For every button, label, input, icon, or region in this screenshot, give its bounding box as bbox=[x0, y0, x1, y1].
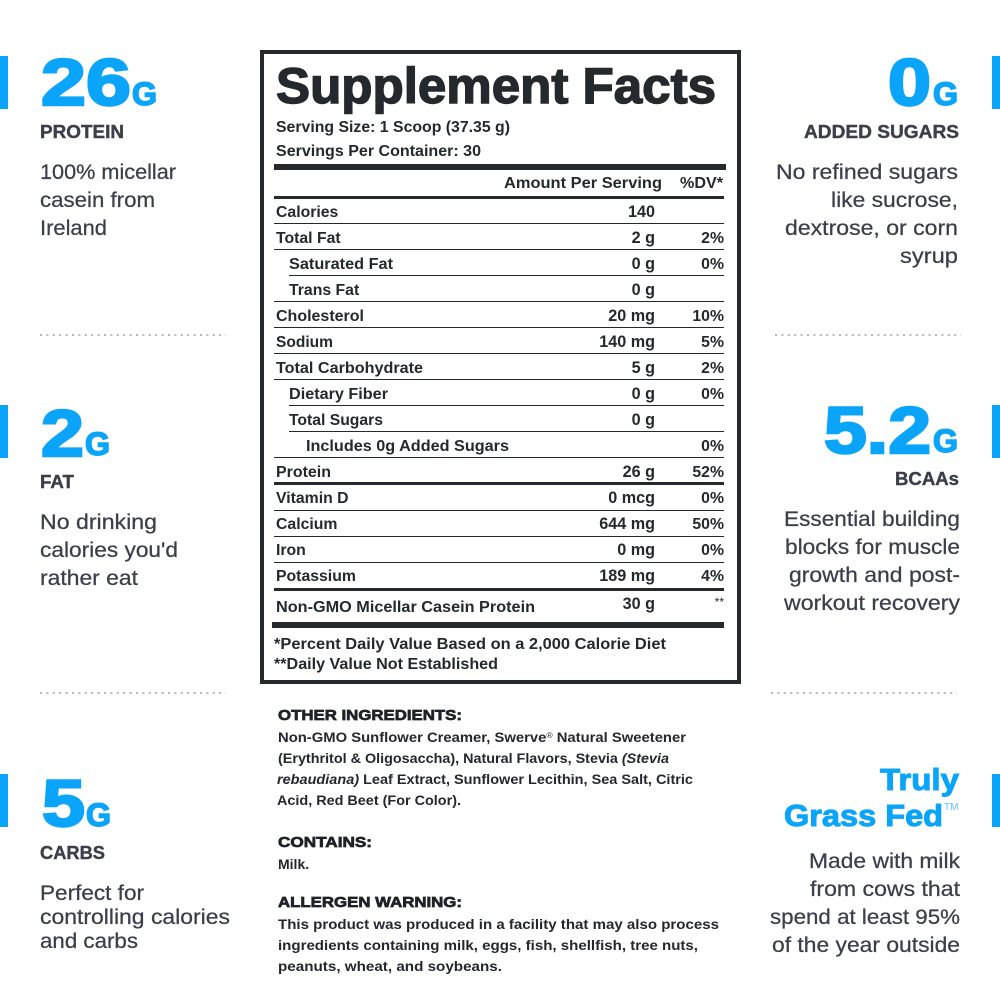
panel: carbs stat: CARBS bbox=[40, 843, 105, 863]
footnotes bbox=[272, 622, 724, 673]
table header bbox=[274, 164, 726, 199]
panel: BCAAs stat bbox=[783, 393, 1000, 615]
panel: protein stat: G bbox=[132, 76, 157, 112]
nutrient rows: Calories bbox=[276, 204, 339, 221]
serving info: Servings Per Container: 30 bbox=[276, 143, 481, 160]
nutrient rows: Saturated Fat bbox=[289, 256, 394, 273]
serving info: Serving Size: 1 Scoop (37.35 g) bbox=[276, 119, 510, 136]
nutrient rows: 189 mg bbox=[599, 567, 655, 585]
nutrient rows: 26 g bbox=[623, 463, 655, 481]
panel: carbs stat bbox=[0, 766, 230, 953]
panel: BCAAs stat: 5.2 bbox=[824, 393, 931, 467]
panel: added sugars stat: dextrose, or corn bbox=[785, 217, 958, 240]
nutrient rows: Vitamin D bbox=[276, 490, 349, 507]
panel: protein stat: Ireland bbox=[40, 217, 107, 240]
panel: grass fed stat: Grass Fed bbox=[784, 798, 943, 833]
nutrient rows: Non-GMO Micellar Casein Protein bbox=[276, 599, 535, 616]
text block: allergen warning: This product was produced in a facility that may also process bbox=[278, 916, 719, 932]
table header: %DV* bbox=[680, 175, 724, 192]
nutrient rows: 52% bbox=[692, 464, 724, 481]
panel: grass fed stat: spend at least 95% bbox=[770, 906, 960, 929]
panel: protein stat: 100% micellar bbox=[40, 161, 176, 184]
panel: BCAAs stat: Essential building bbox=[784, 508, 960, 531]
panel: fat stat: FAT bbox=[40, 472, 74, 492]
nutrient rows: 0 mg bbox=[617, 541, 655, 559]
panel: carbs stat: controlling calories bbox=[40, 906, 230, 929]
nutrient rows: 140 mg bbox=[599, 333, 655, 351]
panel: added sugars stat bbox=[776, 45, 1000, 268]
panel: BCAAs stat: growth and post- bbox=[789, 564, 960, 587]
panel: added sugars stat: G bbox=[933, 76, 958, 112]
nutrient rows: Potassium bbox=[276, 568, 356, 585]
panel: grass fed stat: Made with milk bbox=[809, 850, 961, 873]
heading: supplement facts: Supplement Facts bbox=[276, 58, 716, 114]
nutrient rows: Trans Fat bbox=[289, 282, 360, 299]
text block: allergen warning: peanuts, wheat, and soybeans. bbox=[278, 958, 502, 974]
text block: other ingredients: Natural Sweetener bbox=[553, 729, 687, 745]
nutrient rows: 5% bbox=[701, 334, 724, 351]
nutrient rows: 0 mcg bbox=[608, 489, 655, 507]
panel: added sugars stat: syrup bbox=[900, 245, 958, 268]
nutrient rows: Iron bbox=[276, 542, 306, 559]
nutrient rows: 10% bbox=[692, 308, 724, 325]
panel: BCAAs stat: BCAAs bbox=[895, 469, 959, 489]
nutrient rows: 0% bbox=[701, 542, 724, 559]
nutrient rows: 20 mg bbox=[608, 307, 655, 325]
panel: fat stat: 2 bbox=[41, 396, 84, 470]
nutrient rows: 0% bbox=[701, 386, 724, 403]
panel: BCAAs stat: workout recovery bbox=[783, 592, 961, 615]
nutrient rows: Total Fat bbox=[276, 230, 341, 247]
text block: other ingredients: (Erythritol & Oligosaccha), Natural Flavors, Stevia (Stevia bbox=[278, 750, 669, 766]
nutrient rows: 2% bbox=[701, 230, 724, 247]
text block: other ingredients: Non-GMO Sunflower Creamer, Swerve bbox=[278, 729, 532, 745]
text block: allergen warning: ALLERGEN WARNING: bbox=[278, 895, 462, 911]
nutrient rows: 2 g bbox=[632, 229, 655, 247]
nutrient rows: Sodium bbox=[276, 334, 333, 351]
footnotes: *Percent Daily Value Based on a 2,000 Calorie Diet bbox=[274, 636, 667, 653]
text block: allergen warning: ingredients containing milk, eggs, fish, shellfish, tree nuts, bbox=[278, 937, 698, 953]
panel: grass fed stat: TM bbox=[944, 802, 958, 813]
footnotes: **Daily Value Not Established bbox=[274, 656, 498, 673]
text block: other ingredients: rebaudiana) Leaf Extract, Sunflower Lecithin, Sea Salt, Citric bbox=[277, 771, 693, 787]
nutrient rows: 0 g bbox=[632, 281, 655, 299]
panel: fat stat: calories you'd bbox=[40, 539, 178, 562]
panel: carbs stat: G bbox=[86, 797, 111, 833]
panel: grass fed stat bbox=[770, 762, 1000, 957]
table header: Amount Per Serving bbox=[504, 175, 662, 192]
text block: contains bbox=[278, 835, 372, 872]
panel: grass fed stat: from cows that bbox=[810, 878, 960, 901]
nutrient rows: Calcium bbox=[276, 516, 337, 533]
nutrient rows: 644 mg bbox=[599, 515, 655, 533]
nutrient rows: 140 bbox=[628, 203, 655, 221]
panel: protein stat: casein from bbox=[40, 189, 155, 212]
nutrient rows: ** bbox=[715, 595, 724, 609]
nutrient rows: Dietary Fiber bbox=[289, 386, 388, 403]
nutrient rows: Includes 0g Added Sugars bbox=[306, 438, 509, 455]
nutrient rows: Total Sugars bbox=[289, 412, 383, 429]
text block: other ingredients: Acid, Red Beet (For Color). bbox=[277, 792, 461, 808]
panel: added sugars stat: like sucrose, bbox=[831, 189, 958, 212]
text block: allergen warning bbox=[278, 895, 719, 974]
nutrient rows bbox=[274, 203, 724, 616]
panel: carbs stat: Perfect for bbox=[40, 882, 144, 905]
panel: fat stat bbox=[0, 396, 178, 590]
nutrient rows: Cholesterol bbox=[276, 308, 364, 325]
panel: carbs stat: 5 bbox=[42, 766, 85, 840]
nutrient rows: Total Carbohydrate bbox=[276, 360, 423, 377]
panel: protein stat: PROTEIN bbox=[40, 122, 124, 142]
nutrient rows: Protein bbox=[276, 464, 331, 481]
panel: protein stat: 26 bbox=[41, 45, 131, 119]
panel: added sugars stat: ADDED SUGARS bbox=[804, 122, 959, 142]
nutrient rows: 30 g bbox=[623, 595, 655, 613]
nutrient rows: 0 g bbox=[632, 411, 655, 429]
panel: grass fed stat: Truly bbox=[880, 762, 960, 797]
panel: grass fed stat: of the year outside bbox=[772, 934, 960, 957]
panel: added sugars stat: No refined sugars bbox=[776, 161, 958, 184]
text block: contains: Milk. bbox=[278, 856, 309, 872]
nutrient rows: 2% bbox=[701, 360, 724, 377]
panel: carbs stat: and carbs bbox=[40, 930, 138, 953]
serving info bbox=[276, 119, 510, 160]
panel: BCAAs stat: blocks for muscle bbox=[785, 536, 960, 559]
text block: contains: CONTAINS: bbox=[278, 835, 372, 851]
nutrient rows: 0 g bbox=[632, 385, 655, 403]
nutrient rows: 0% bbox=[701, 256, 724, 273]
nutrient rows: 4% bbox=[701, 568, 724, 585]
nutrient rows: 0% bbox=[701, 438, 724, 455]
panel: added sugars stat: 0 bbox=[888, 45, 931, 119]
panel: protein stat bbox=[0, 45, 176, 240]
panel: fat stat: G bbox=[85, 426, 110, 462]
nutrient rows: 50% bbox=[692, 516, 724, 533]
panel: fat stat: rather eat bbox=[40, 567, 138, 590]
text block: other ingredients: OTHER INGREDIENTS: bbox=[278, 708, 462, 724]
nutrient rows: 0 g bbox=[632, 255, 655, 273]
panel: BCAAs stat: G bbox=[933, 423, 958, 459]
text block: other ingredients bbox=[277, 708, 693, 808]
panel: supplement facts label bbox=[262, 52, 739, 682]
nutrient rows: 0% bbox=[701, 490, 724, 507]
nutrient rows: 5 g bbox=[632, 359, 655, 377]
text block: other ingredients: ® bbox=[546, 731, 553, 740]
panel: fat stat: No drinking bbox=[40, 511, 157, 534]
